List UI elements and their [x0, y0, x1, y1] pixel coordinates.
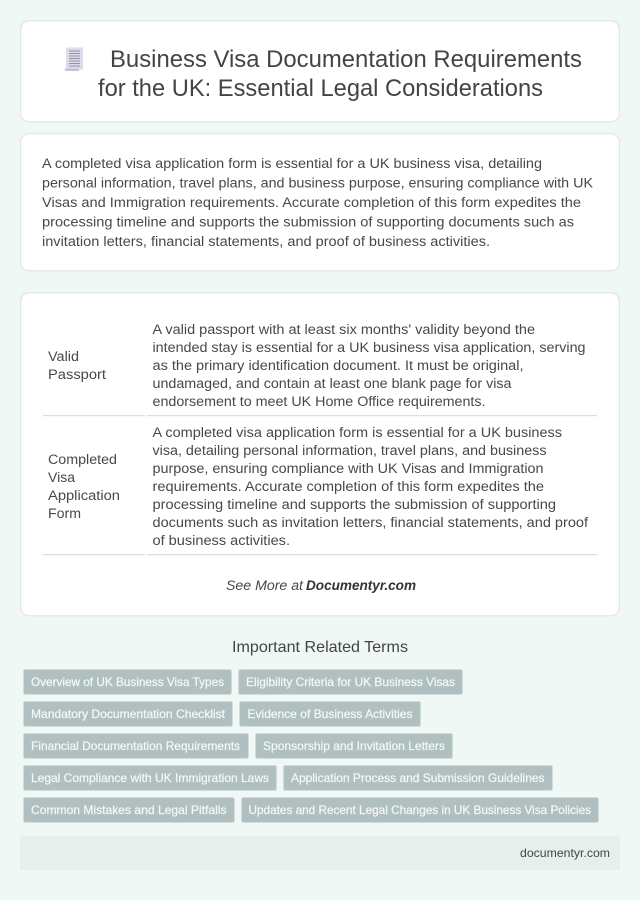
tag: Eligibility Criteria for UK Business Visas — [246, 675, 455, 689]
panel: requirements table — [21, 293, 619, 616]
tag: Evidence of Business Activities — [248, 707, 413, 721]
row label: Valid Passport — [48, 349, 106, 383]
tag — [24, 702, 232, 726]
tag — [242, 798, 598, 822]
panel: introduction — [21, 134, 619, 271]
row text: Completed Visa Application Form: A completed visa application form is essential for a UK business — [152, 425, 562, 441]
row text: Completed Visa Application Form: processing timeline and supports the submission of supporting — [152, 497, 556, 513]
tag list — [24, 670, 598, 822]
tag: Overview of UK Business Visa Types — [31, 675, 224, 689]
row label: Completed Visa Application Form: Visa — [48, 470, 75, 486]
see more link — [226, 578, 416, 594]
row text: Valid Passport: A valid passport with at least six months' validity beyond the — [152, 322, 535, 338]
tag: Financial Documentation Requirements — [31, 739, 240, 753]
intro text: personal information, travel plans, and business purpose, ensuring compliance with UK — [42, 176, 594, 192]
row text: Completed Visa Application Form: purpose, ensuring compliance with UK Visas and Immigration — [152, 461, 544, 477]
row text: Completed Visa Application Form: documents such as invitation letters, financial statements, and proof — [152, 515, 588, 531]
row text: Valid Passport: as the primary identification document. It must be original, — [152, 358, 524, 374]
row text: Valid Passport — [152, 322, 586, 410]
tag — [24, 734, 248, 758]
tag: Mandatory Documentation Checklist — [31, 707, 226, 721]
row text: Completed Visa Application Form — [152, 425, 588, 549]
row label: Completed Visa Application Form: Application — [48, 488, 120, 504]
title: Business Visa Documentation Requirements — [110, 46, 582, 73]
row text: Valid Passport: endorsement to meet UK Home Office requirements. — [152, 394, 486, 410]
row label: Valid Passport: Passport — [48, 367, 106, 383]
tag — [240, 702, 420, 726]
tag — [256, 734, 452, 758]
row label: Completed Visa Application Form: Completed — [48, 452, 117, 468]
row text: Completed Visa Application Form: requirements. Accurate completion of this form expedites the — [152, 479, 544, 495]
tag — [24, 766, 276, 790]
row text: Valid Passport: undamaged, and contain at least one blank page for visa — [152, 376, 512, 392]
row text: Completed Visa Application Form: of business activities. — [152, 533, 290, 549]
row text: Completed Visa Application Form: visa, detailing personal information, travel plans, and business — [152, 443, 546, 459]
row label: Completed Visa Application Form: Form — [48, 506, 81, 522]
see more link: Documentyr.com — [306, 578, 416, 594]
intro text — [42, 156, 594, 250]
tag — [284, 766, 552, 790]
footer: documentyr.com — [520, 846, 610, 860]
intro text: A completed visa application form is essential for a UK business visa, detailing — [42, 156, 542, 172]
panel: title header — [21, 21, 619, 122]
tag: Application Process and Submission Guidelines — [291, 771, 545, 785]
tag: Common Mistakes and Legal Pitfalls — [31, 803, 227, 817]
intro text: invitation letters, financial statements, and proof of business activities. — [42, 234, 490, 250]
tag: Legal Compliance with UK Immigration Laws — [31, 771, 269, 785]
tag — [24, 798, 234, 822]
heading: Important Related Terms: Important Related Terms — [232, 639, 408, 656]
tag: Sponsorship and Invitation Letters — [263, 739, 445, 753]
tag: Updates and Recent Legal Changes in UK Business Visa Policies — [248, 803, 591, 817]
title: for the UK: Essential Legal Considerations — [98, 75, 543, 102]
see more link: See More at — [226, 578, 304, 594]
row text: Valid Passport: intended stay is essential for a UK business visa application, serving — [152, 340, 586, 356]
icon: document scroll — [64, 48, 83, 71]
row label: Completed Visa Application Form — [48, 452, 120, 522]
row label: Valid Passport: Valid — [48, 349, 79, 365]
tag — [24, 670, 232, 694]
footer — [20, 836, 620, 870]
tag — [238, 670, 462, 694]
intro text: Visas and Immigration requirements. Accurate completion of this form expedites the — [42, 195, 581, 211]
title — [98, 46, 582, 102]
intro text: processing timeline and supports the submission of supporting documents such as — [42, 214, 574, 230]
